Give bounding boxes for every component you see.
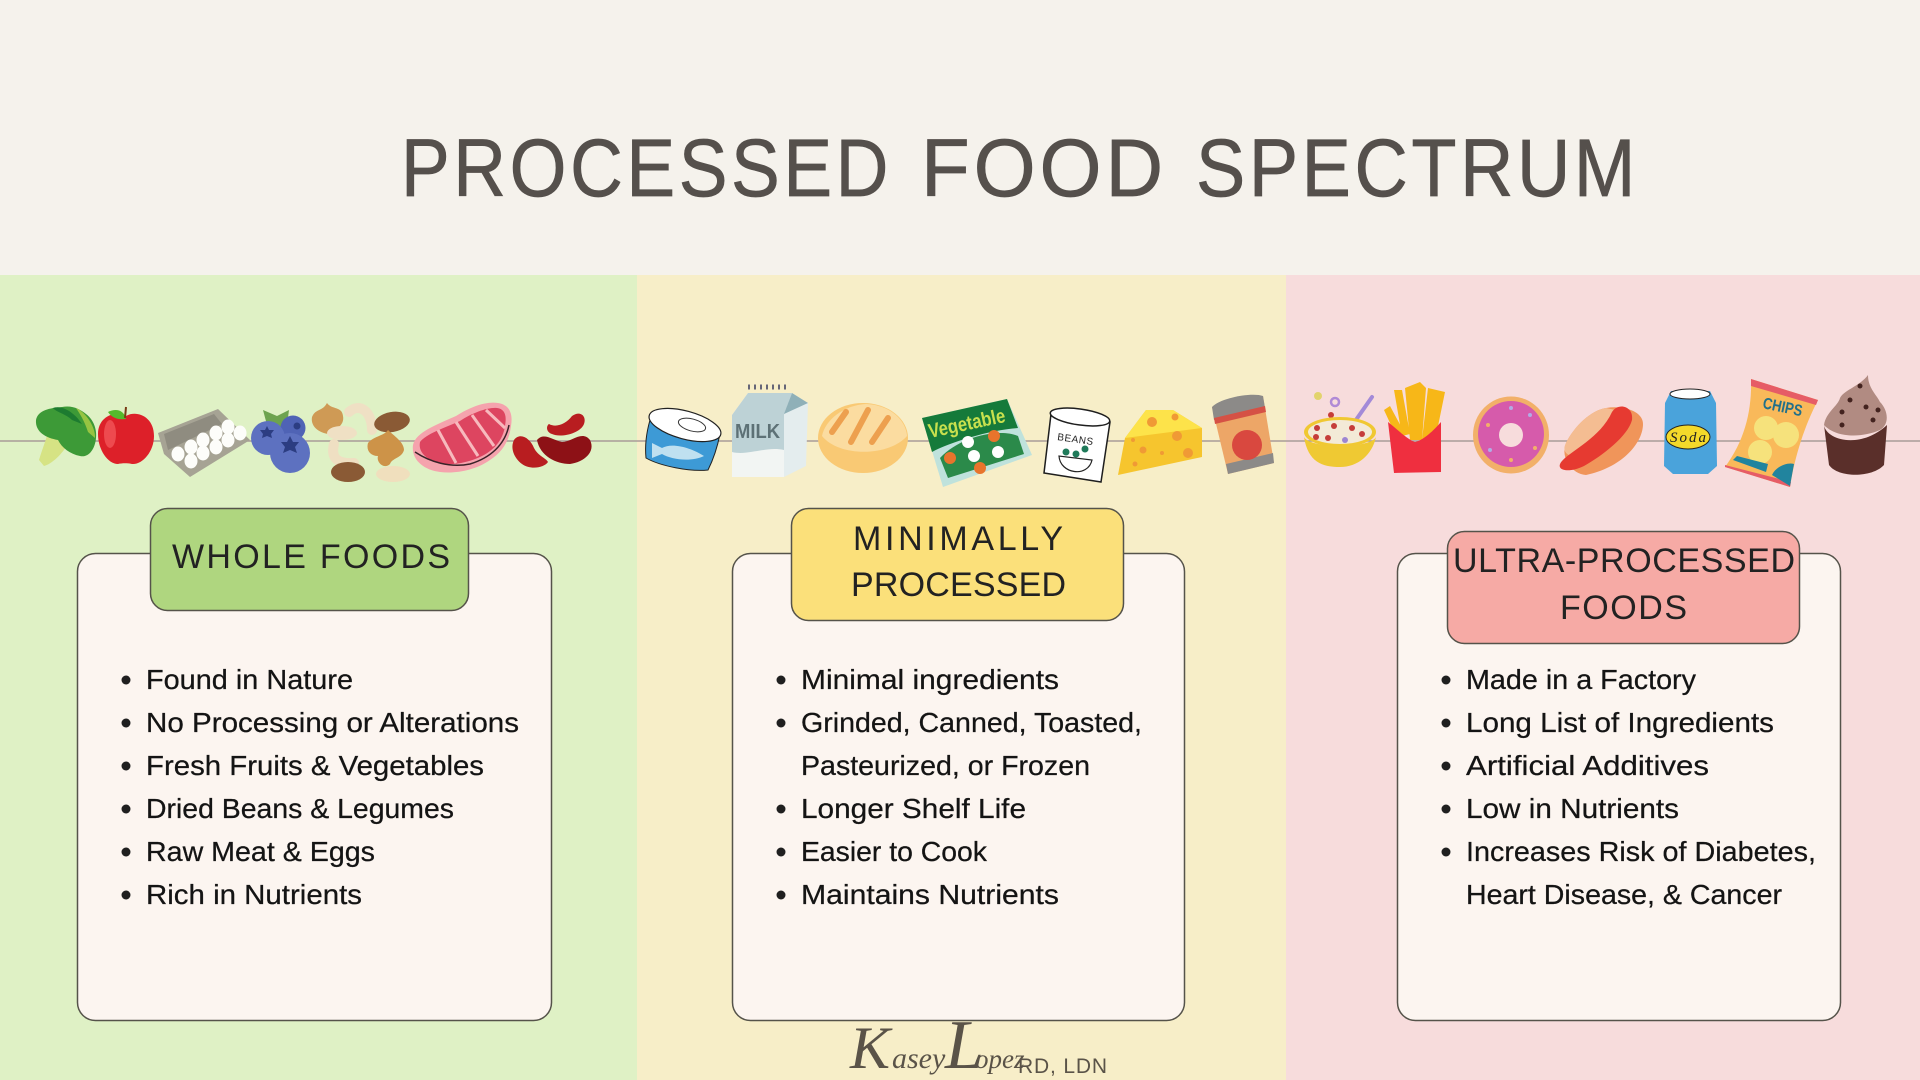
- icon: bread loaf: [818, 403, 908, 473]
- list: ultra-processed foods: Artificial Additives: [1466, 750, 1709, 781]
- icon: milk carton: [732, 387, 808, 477]
- icon: tomato can: [1212, 395, 1274, 474]
- title: SPECTRUM: [1196, 123, 1639, 214]
- list: ultra-processed foods: Heart Disease, & Cancer: [1466, 879, 1782, 910]
- signature: asey: [892, 1042, 953, 1075]
- list: whole foods: Found in Nature: [146, 664, 353, 695]
- signature: RD, LDN: [1018, 1055, 1107, 1078]
- heading: minimally processed: [792, 508, 1124, 620]
- icon: french fries: [1384, 382, 1445, 473]
- icon: frozen vegetable bag: [922, 399, 1032, 487]
- icon: soda can: [1664, 389, 1717, 474]
- signature: [849, 1007, 1107, 1080]
- panel: ultra-processed background: [1286, 275, 1920, 1080]
- icon row: whole foods: [36, 403, 592, 482]
- icon: chips bag: CHIPS: [1761, 395, 1804, 420]
- panel: minimally processed card: [732, 508, 1184, 1020]
- signature: opez: [975, 1044, 1025, 1074]
- icon: broccoli: [36, 406, 96, 466]
- list: ultra-processed foods: Long List of Ingredients: [1466, 707, 1774, 738]
- heading: whole foods: [150, 508, 468, 610]
- panel: whole foods background: [0, 275, 637, 1080]
- icon: blueberries: [251, 410, 310, 473]
- list: minimally processed: Longer Shelf Life: [801, 793, 1026, 824]
- icon: frozen vegetable bag: Vegetable: [926, 405, 1007, 443]
- heading: ultra-processed foods: FOODS: [1560, 589, 1687, 627]
- icon row: minimally processed: [646, 387, 1274, 487]
- signature: K: [849, 1015, 893, 1080]
- panel: whole foods card: [78, 508, 552, 1020]
- panel: minimally processed background: [637, 275, 1286, 1080]
- list: minimally processed: Grinded, Canned, Toasted,: [801, 707, 1142, 738]
- icon: kidney beans: [512, 414, 592, 468]
- heading: whole foods: WHOLE FOODS: [172, 538, 450, 576]
- list: minimally processed: [776, 664, 1142, 910]
- icon: nuts: [312, 403, 411, 482]
- list: minimally processed: Pasteurized, or Frozen: [801, 750, 1090, 781]
- icon: cupcake: [1824, 375, 1887, 475]
- heading: minimally processed: PROCESSED: [851, 566, 1066, 604]
- list: whole foods: [122, 664, 519, 910]
- icon: egg carton: [158, 409, 250, 477]
- icon: apple: [98, 407, 154, 464]
- list: whole foods: Dried Beans & Legumes: [146, 793, 454, 824]
- icon: milk carton: MILK: [735, 421, 780, 443]
- icon: steak: [413, 403, 512, 472]
- heading: ultra-processed foods: [1448, 532, 1800, 644]
- list: ultra-processed foods: [1442, 664, 1816, 910]
- icon: can of beans: [1044, 405, 1111, 482]
- heading: ultra-processed foods: ULTRA-PROCESSED: [1453, 542, 1795, 580]
- title: [401, 123, 1639, 214]
- list: whole foods: Fresh Fruits & Vegetables: [146, 750, 484, 781]
- icon row: ultra-processed foods: [1304, 375, 1887, 487]
- title: PROCESSED: [401, 123, 892, 214]
- list: minimally processed: Minimal ingredients: [801, 664, 1059, 695]
- icon: cereal bowl: [1304, 392, 1376, 467]
- icon: hot dog: [1560, 406, 1643, 475]
- list: ultra-processed foods: Low in Nutrients: [1466, 793, 1679, 824]
- title: FOOD: [921, 123, 1167, 214]
- list: ultra-processed foods: Made in a Factory: [1466, 664, 1696, 695]
- icon: canned tuna: [646, 402, 724, 470]
- icon: chips bag: [1725, 379, 1818, 487]
- list: minimally processed: Easier to Cook: [801, 836, 987, 867]
- icon: can of beans: BEANS: [1057, 432, 1094, 448]
- list: whole foods: No Processing or Alterations: [146, 707, 519, 738]
- icon: soda can: Soda: [1670, 430, 1706, 446]
- list: ultra-processed foods: Increases Risk of Diabetes,: [1466, 836, 1816, 867]
- list: whole foods: Rich in Nutrients: [146, 879, 362, 910]
- panel: ultra-processed card: [1398, 532, 1840, 1020]
- list: minimally processed: Maintains Nutrients: [801, 879, 1059, 910]
- list: whole foods: Raw Meat & Eggs: [146, 836, 375, 867]
- icon: donut: [1473, 396, 1549, 474]
- icon: cheese: [1118, 410, 1202, 475]
- heading: minimally processed: MINIMALLY: [853, 520, 1063, 558]
